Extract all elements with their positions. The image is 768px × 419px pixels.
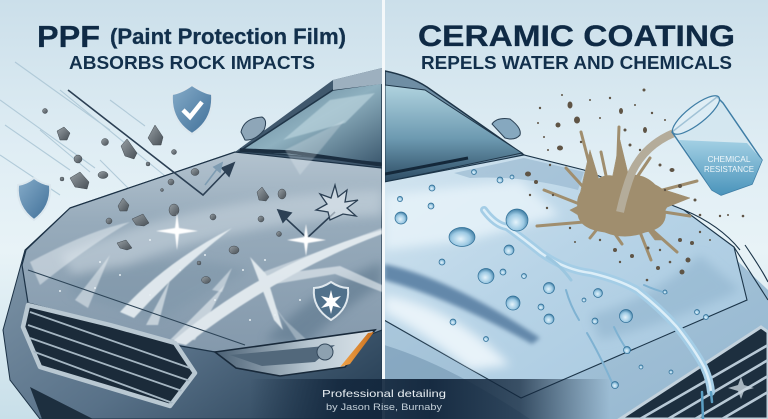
icon: small shield bbox=[18, 178, 50, 220]
panel: PPF car with film bbox=[0, 62, 382, 419]
subheading: ceramic coating: REPELS WATER AND CHEMICALS bbox=[421, 53, 732, 73]
water streams bbox=[484, 210, 712, 419]
hood reflections bbox=[384, 158, 740, 370]
side mirror right bbox=[492, 119, 520, 139]
hood left bbox=[22, 152, 382, 352]
footer text: Professional detailing bbox=[322, 388, 446, 400]
beaker label: CHEMICAL bbox=[708, 154, 751, 164]
car body left bbox=[3, 150, 382, 419]
heading: PPF: PPF bbox=[37, 19, 100, 54]
rebound arrow 2 bbox=[278, 210, 335, 238]
beaker with chemical bbox=[668, 90, 762, 195]
footer credit band bbox=[250, 379, 610, 419]
icon: shield on hood bbox=[314, 282, 348, 320]
grille right bbox=[620, 327, 768, 419]
film speckles bbox=[59, 239, 301, 321]
wiper right bbox=[385, 158, 468, 174]
film highlights bbox=[30, 120, 382, 350]
hood crease line bbox=[28, 270, 245, 345]
dirt specks bbox=[525, 88, 744, 281]
star outline impact bbox=[316, 185, 358, 220]
wipers left bbox=[240, 150, 382, 165]
side fender edge bbox=[684, 210, 768, 300]
dirt splash bbox=[537, 127, 697, 260]
rocks bbox=[42, 108, 286, 284]
rebound arrow 1 bbox=[68, 90, 234, 195]
panel: ceramic coated car bbox=[384, 71, 768, 419]
icon: shield check bbox=[172, 85, 212, 134]
footer author: by Jason Rise, Burnaby bbox=[326, 402, 442, 413]
motion lines bbox=[0, 62, 165, 196]
hood right bbox=[384, 155, 747, 398]
side mirror left bbox=[241, 117, 266, 140]
beaker with chemical: RESISTANCE bbox=[704, 164, 754, 174]
heading: ceramic coating: CERAMIC COATING bbox=[418, 20, 735, 53]
roof and windshield left bbox=[235, 68, 382, 170]
subheading: PPF: ABSORBS ROCK IMPACTS bbox=[69, 53, 315, 73]
headlight bbox=[215, 330, 375, 376]
water drops bbox=[395, 170, 708, 388]
heading: PPF bbox=[37, 19, 346, 54]
chemical stream bbox=[620, 133, 674, 212]
divider bbox=[382, 0, 385, 379]
roof and windshield right bbox=[385, 71, 524, 186]
lower intake left bbox=[30, 387, 93, 419]
hood shadow bands bbox=[60, 190, 382, 345]
grille left bbox=[23, 305, 195, 406]
heading: PPF: (Paint Protection Film) bbox=[110, 24, 346, 49]
impact bursts bbox=[156, 213, 326, 256]
front and fender right bbox=[385, 262, 768, 419]
